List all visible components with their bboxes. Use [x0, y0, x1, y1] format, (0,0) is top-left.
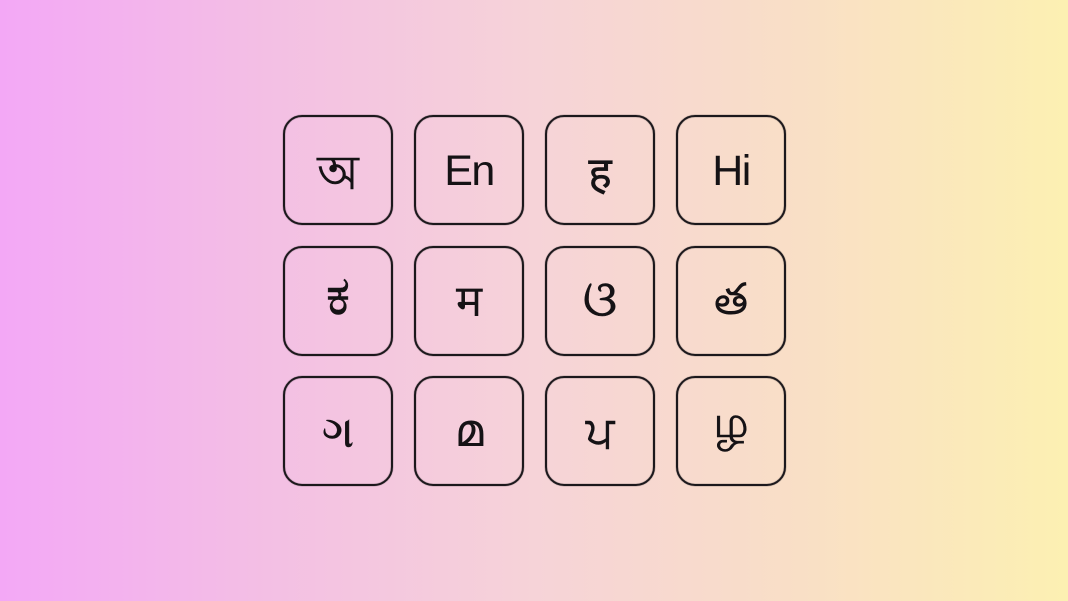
key: English En: [414, 115, 524, 225]
key: Hindi letter: ह: [588, 149, 612, 198]
key: Latin Hi: [676, 115, 786, 225]
key: Bengali letter: অ: [317, 147, 359, 200]
key: Kannada letter: ಕ: [326, 266, 350, 326]
key: Telugu letter: త: [714, 275, 748, 324]
key: Marathi letter: [414, 246, 524, 356]
key: Latin Hi: Hi: [712, 147, 750, 195]
key: Malayalam letter: മ: [455, 404, 483, 456]
key: Hindi letter: [545, 115, 655, 225]
key: Malayalam letter: [414, 376, 524, 486]
key: English En: En: [444, 147, 494, 195]
key: Tamil letter: ழ: [713, 398, 749, 447]
key: Marathi letter: म: [456, 277, 482, 326]
panel: language key grid: [282, 114, 787, 487]
key: Telugu letter: [676, 246, 786, 356]
key: Kannada letter: [283, 246, 393, 356]
key: Odia letter: [545, 246, 655, 356]
key: Gurmukhi letter: ਪ: [586, 408, 614, 457]
key: Odia letter: ଓ: [583, 271, 617, 327]
key: Bengali letter: [283, 115, 393, 225]
key: Gurmukhi letter: [545, 376, 655, 486]
key: Tamil letter: [676, 376, 786, 486]
key: Gujarati letter: [283, 376, 393, 486]
key: Gujarati letter: ગ: [322, 408, 354, 457]
